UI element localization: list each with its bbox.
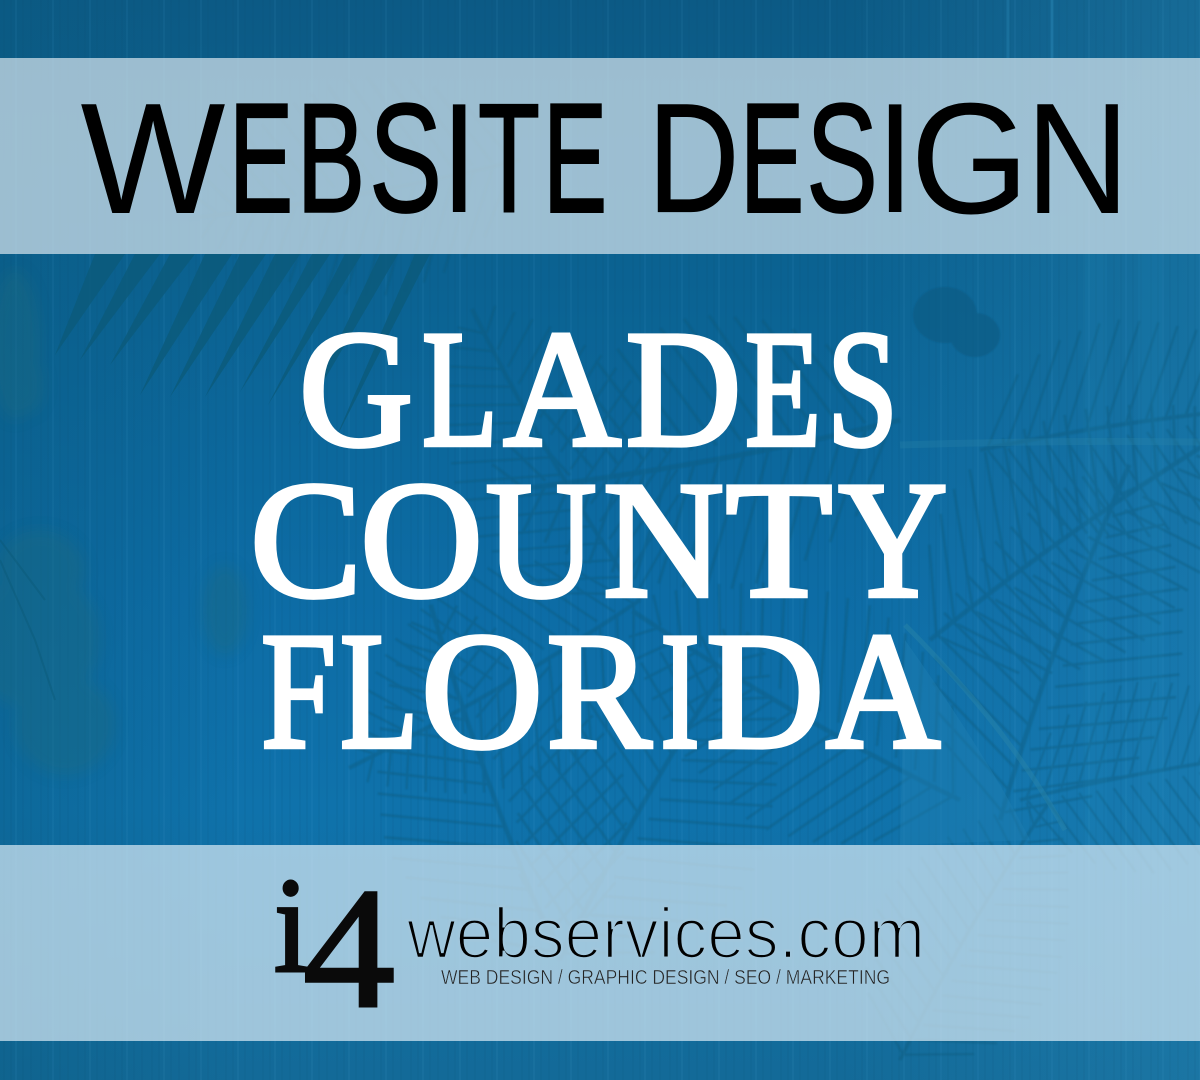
word: county: O: [360, 448, 483, 633]
heading: website design: B: [297, 72, 365, 244]
word: county: C: [250, 448, 362, 633]
word: glades: S: [827, 297, 898, 482]
heading: website design: E: [229, 72, 293, 244]
word: county: U: [486, 448, 596, 633]
heading: website design: E: [740, 72, 804, 244]
heading: website design: [80, 71, 1130, 247]
word: glades: L: [422, 297, 498, 482]
logo mark i4: [274, 851, 395, 1044]
bottom band: [0, 845, 1200, 1041]
heading: website design: E: [543, 72, 607, 244]
logo: i4webservices.com: [274, 851, 925, 1044]
logo mark i4: i: [274, 851, 309, 1001]
left tree foliage: [0, 270, 247, 775]
top band: [0, 58, 1200, 254]
word: florida: A: [826, 599, 940, 784]
heading: website design: W: [80, 71, 225, 247]
hanging palm leaves, upper left: [55, 254, 430, 440]
heading: website design: S: [806, 72, 878, 244]
word: glades: [299, 297, 898, 482]
word: florida: [261, 599, 940, 784]
heading: website design: N: [1026, 71, 1130, 247]
heading: website design: T: [478, 72, 540, 244]
word: glades: G: [299, 297, 413, 482]
logo tagline: WEB DESIGN / GRAPHIC DESIGN / SEO / MARKETING: [441, 967, 890, 989]
word: county: Y: [838, 448, 948, 633]
word: florida: O: [421, 599, 543, 784]
word: county: T: [726, 448, 832, 633]
word: glades: D: [626, 297, 742, 482]
word: county: N: [603, 448, 724, 633]
word: florida: L: [340, 599, 418, 784]
pale frond stems: [905, 625, 1065, 830]
heading: website design: I: [878, 72, 913, 244]
word: florida: R: [546, 599, 652, 784]
word: county: [250, 448, 948, 633]
word: glades: A: [503, 297, 621, 482]
word: florida: I: [660, 599, 700, 784]
word: florida: F: [261, 599, 336, 784]
title: location: [250, 297, 948, 784]
dark palm silhouette, upper right: [913, 287, 1000, 357]
logo wordmark: webservices.com: [406, 895, 925, 974]
heading: website design: G: [910, 71, 1029, 247]
word: florida: D: [706, 599, 824, 784]
logo mark i4: 4: [303, 854, 395, 1044]
heading: website design: I: [442, 72, 477, 244]
heading: website design: D: [648, 72, 739, 244]
heading: website design: S: [369, 72, 442, 244]
word: glades: E: [745, 297, 821, 482]
